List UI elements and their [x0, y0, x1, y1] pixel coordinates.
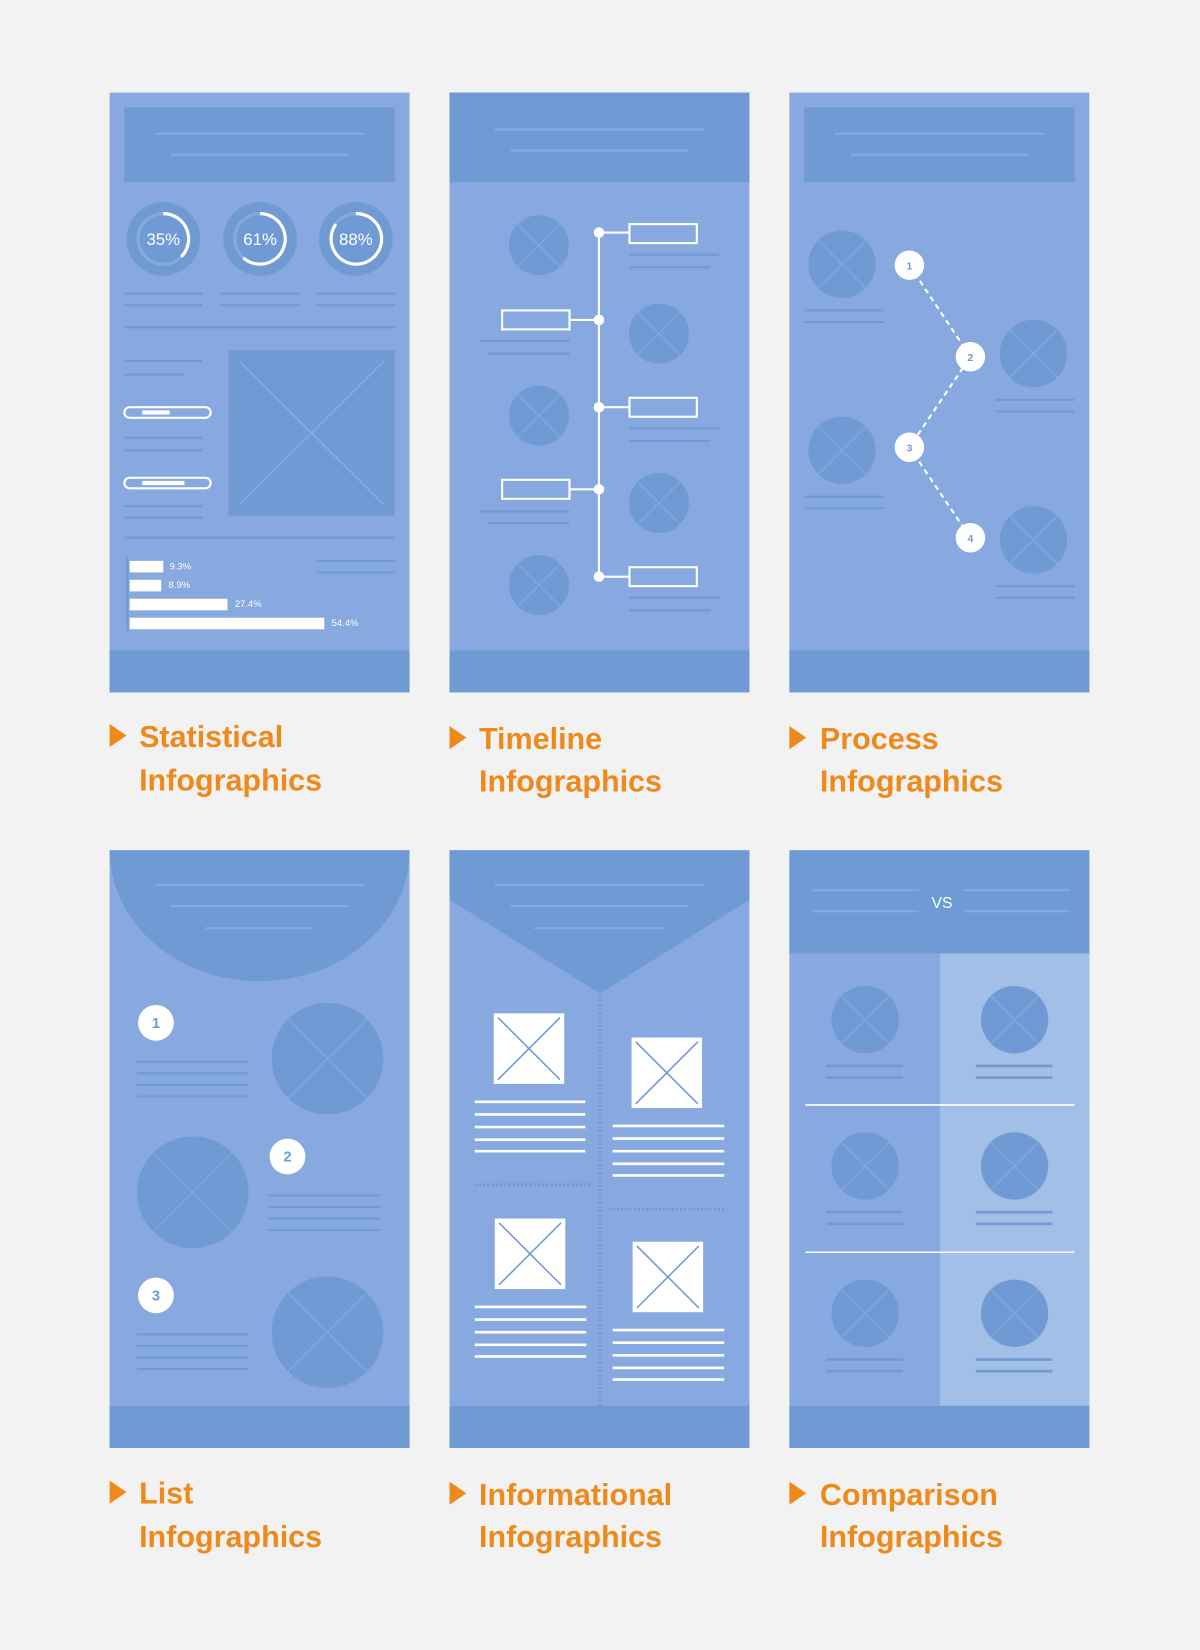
bar chart [128, 558, 359, 631]
panel: process: 1 [906, 260, 912, 272]
label: timeline [450, 722, 662, 798]
label: informational [450, 1478, 672, 1554]
header [124, 107, 395, 182]
label: process [789, 722, 1003, 798]
label: statistical: Infographics [139, 763, 322, 797]
panel: informational [450, 850, 749, 1448]
bar chart: 8.9% [169, 580, 191, 591]
panel: process: 3 [906, 442, 912, 454]
image placeholder [229, 350, 395, 516]
donut stats: 35% [146, 230, 180, 249]
label: comparison [789, 1478, 1003, 1554]
donut stats [126, 202, 393, 276]
label: statistical: Statistical [139, 720, 283, 754]
label: comparison: Infographics [820, 1520, 1003, 1554]
label: process: Process [820, 722, 939, 756]
progress bars [124, 407, 211, 418]
label: list [110, 1477, 322, 1554]
label: informational: Infographics [479, 1520, 662, 1554]
panel: process [789, 93, 1089, 692]
donut stats: 61% [243, 230, 277, 249]
label: statistical [110, 720, 322, 797]
panel: comparison: VS [931, 895, 953, 912]
label: timeline: Timeline [479, 722, 602, 756]
panel: process: 2 [967, 352, 973, 364]
panel: list: 1 [152, 1016, 160, 1032]
panel: timeline [450, 93, 749, 692]
panel: list: 3 [152, 1289, 160, 1305]
panel: list: 2 [283, 1150, 292, 1166]
bar chart: 27.4% [235, 599, 262, 610]
label: process: Infographics [820, 764, 1003, 798]
panel: list [110, 850, 410, 1448]
timeline axis [598, 233, 600, 577]
label: informational: Informational [479, 1478, 672, 1512]
label: comparison: Comparison [820, 1478, 998, 1512]
donut stats: 88% [339, 230, 373, 249]
bar chart: 54.4% [332, 618, 359, 629]
bar chart: 9.3% [170, 561, 192, 572]
label: list: List [139, 1477, 193, 1511]
label: timeline: Infographics [479, 764, 662, 798]
label: list: Infographics [139, 1520, 322, 1554]
panel: process: 4 [967, 533, 973, 545]
panel: statistical [110, 93, 410, 692]
panel: comparison [789, 850, 1089, 1448]
